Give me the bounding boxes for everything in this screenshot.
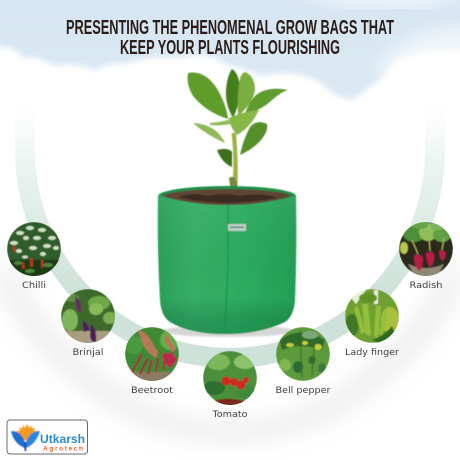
- crop: chilli: [7, 222, 61, 291]
- chilli label: Chilli: [22, 281, 46, 291]
- leaf: right lower: [240, 122, 267, 155]
- crop: radish: [399, 221, 453, 291]
- leaf: large left: [188, 73, 228, 119]
- bag shadow: [162, 325, 294, 337]
- grow bag: [158, 186, 296, 337]
- leaf: long right: [245, 89, 288, 114]
- logo box: [7, 420, 88, 454]
- leaf: upper centre right: [238, 72, 255, 116]
- bag label tag: [228, 224, 246, 231]
- lady finger photo: [345, 289, 399, 344]
- plant: [188, 69, 288, 193]
- logo: Utkarsh Agrotech: [7, 420, 88, 454]
- logo icon: [11, 424, 40, 451]
- crop: lady finger: [345, 289, 399, 358]
- tomato label: Tomato: [211, 410, 248, 420]
- bag body: [158, 195, 296, 334]
- brinjal label: Brinjal: [72, 348, 104, 358]
- bag rim: [158, 186, 296, 206]
- chilli photo: [7, 222, 61, 278]
- title: [66, 17, 394, 59]
- logo tagline: Agrotech: [43, 446, 83, 452]
- curved green arc band: [25, 100, 435, 358]
- radish label: Radish: [410, 281, 442, 291]
- leaf: tall centre: [226, 69, 240, 118]
- plant stem: [232, 133, 238, 192]
- bell pepper label: Bell pepper: [276, 386, 331, 396]
- beetroot label: Beetroot: [131, 386, 174, 396]
- beetroot photo: [125, 327, 180, 382]
- crop: bell pepper: [276, 327, 331, 396]
- title: KEEP YOUR PLANTS FLOURISHING: [120, 37, 340, 59]
- lady finger label: Lady finger: [345, 348, 399, 358]
- crop: brinjal: [60, 289, 117, 358]
- leaf: small lower dark: [217, 149, 232, 167]
- crop: tomato: [203, 351, 257, 420]
- soil: [162, 189, 292, 205]
- logo name: Utkarsh: [40, 434, 85, 446]
- crop: beetroot: [125, 327, 180, 396]
- bell pepper photo: [276, 327, 330, 381]
- leaf: small left: [193, 123, 225, 143]
- brinjal photo: [60, 289, 117, 345]
- radish photo: [399, 221, 453, 278]
- tomato photo: [203, 351, 257, 410]
- leaf: front centre: [229, 110, 259, 135]
